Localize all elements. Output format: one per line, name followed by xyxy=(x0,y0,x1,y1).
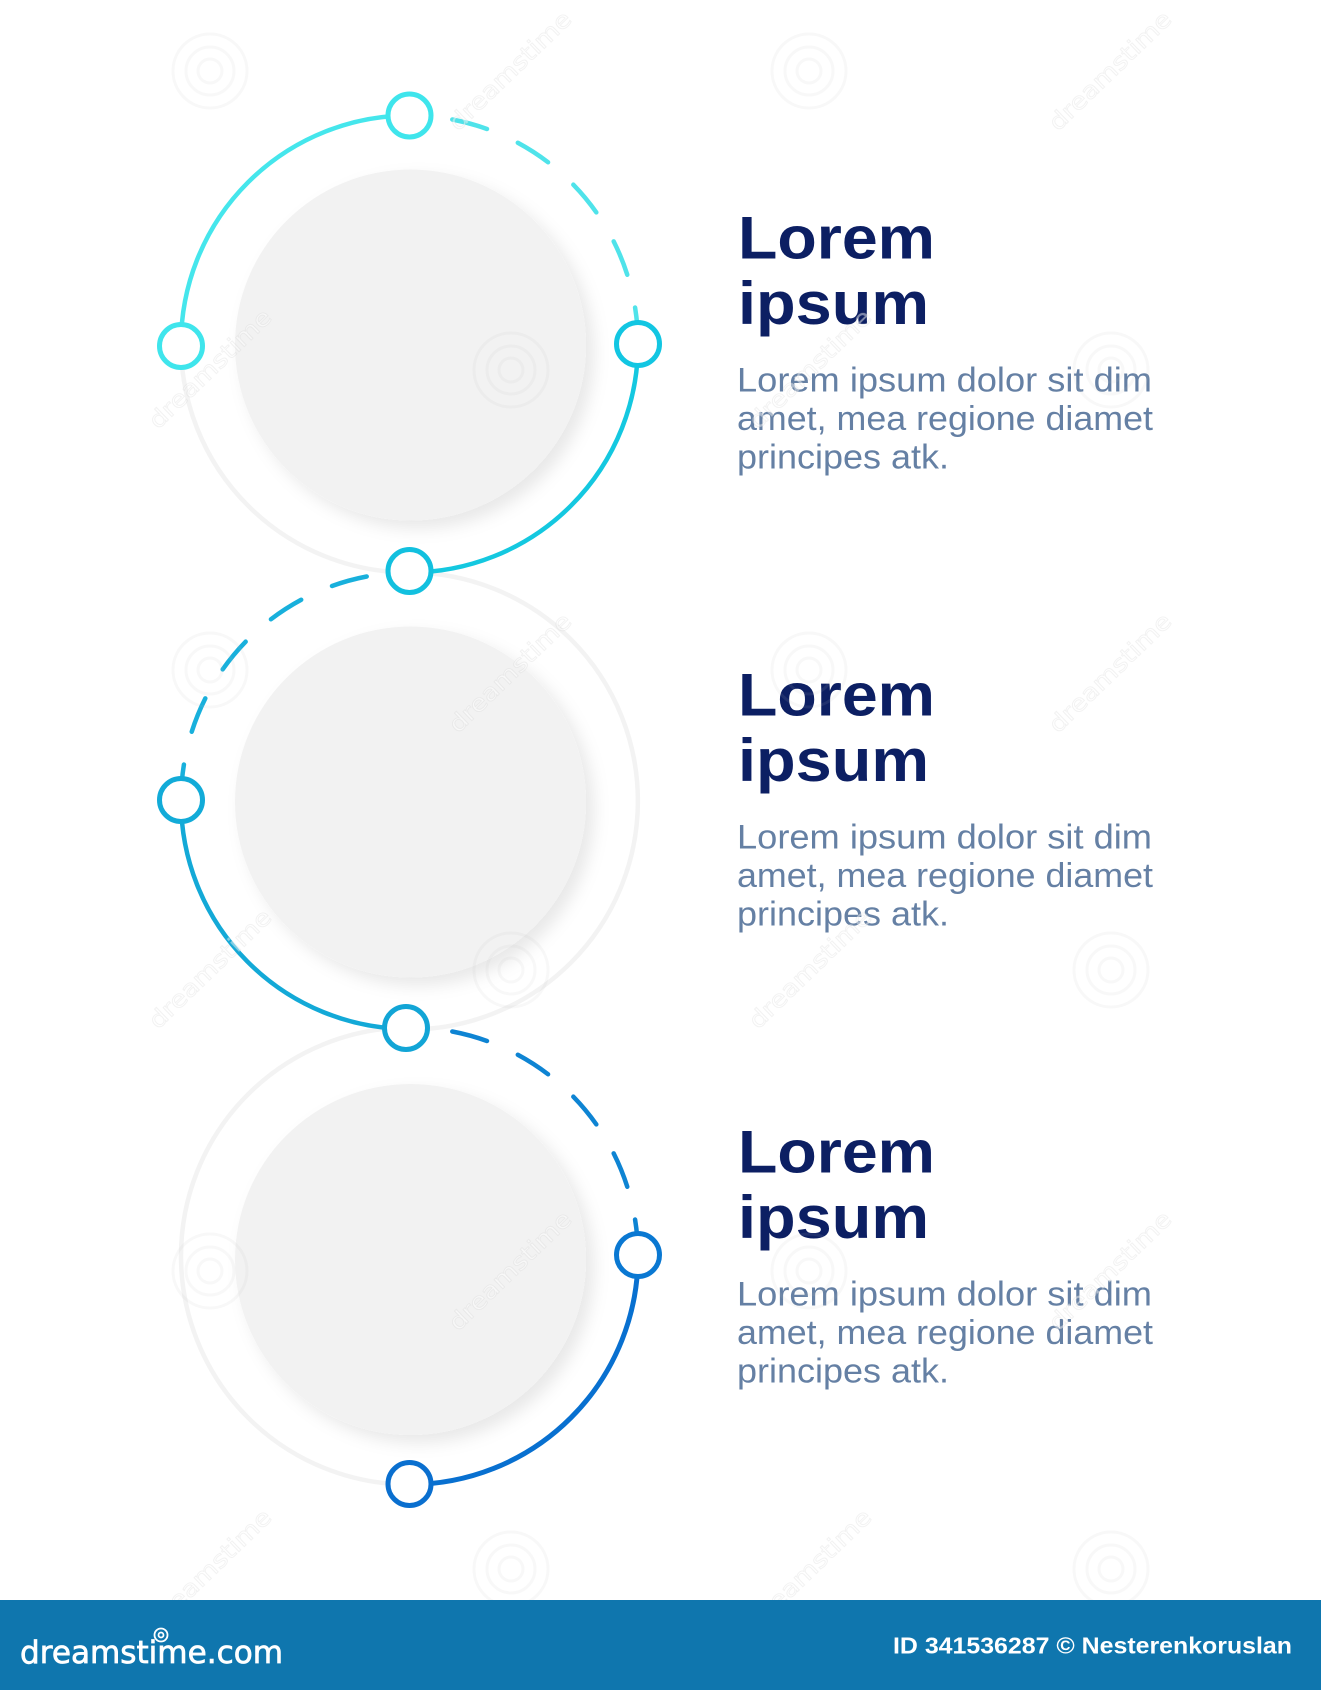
watermark text: dreamstime xyxy=(1044,6,1177,136)
watermark text: dreamstime xyxy=(444,1206,577,1336)
watermark text: dreamstime xyxy=(1044,1206,1177,1336)
description 3: Lorem ipsum dolor sit dim xyxy=(737,1276,1152,1314)
heading 2: Lorem xyxy=(738,662,935,728)
dashed arc 3 xyxy=(452,1032,638,1256)
watermark text: dreamstime xyxy=(1044,608,1177,738)
heading 1: ipsum xyxy=(738,270,929,337)
node bottom 3 xyxy=(388,1462,431,1506)
heading 2 xyxy=(738,662,935,794)
node left 1 xyxy=(160,324,202,368)
description 3: principes atk. xyxy=(737,1352,949,1390)
heading 3: ipsum xyxy=(738,1184,929,1251)
dashed arc 2 xyxy=(181,576,367,801)
description 1 xyxy=(737,362,1154,476)
heading 3 xyxy=(738,1118,935,1251)
node right 3 xyxy=(616,1234,660,1276)
circle panel 3 xyxy=(235,1084,586,1435)
disc 3 xyxy=(235,1084,586,1435)
node bottom 1 xyxy=(388,550,431,592)
watermark text: dreamstime xyxy=(144,1504,277,1634)
heading 2: ipsum xyxy=(738,727,929,794)
watermark text: dreamstime xyxy=(144,304,277,434)
faint rings xyxy=(181,344,638,1484)
watermark text xyxy=(144,6,1177,1634)
footer credit: ID 341536287 © Nesterenkoruslan xyxy=(893,1632,1292,1658)
description 2 xyxy=(737,818,1154,934)
node left 2 xyxy=(160,778,202,822)
disc 2 xyxy=(235,626,586,978)
solid arc lower right 3 xyxy=(410,1256,638,1484)
circle panel 2 xyxy=(235,626,586,978)
watermark text: dreamstime xyxy=(744,904,877,1034)
heading 1: Lorem xyxy=(738,204,935,272)
solid arc lower right xyxy=(410,344,638,572)
watermark spirals xyxy=(173,34,1148,1606)
icon: logo spiral xyxy=(154,1628,168,1642)
watermark text: dreamstime xyxy=(444,6,577,136)
node right 1 xyxy=(616,322,660,366)
node top 1 xyxy=(388,94,431,137)
description 2: principes atk. xyxy=(737,896,949,934)
description 1: amet, mea regione diamet xyxy=(737,400,1154,438)
timeline step 1 xyxy=(181,116,638,572)
watermark text: dreamstime xyxy=(744,1504,877,1634)
node bottom 2 xyxy=(384,1006,428,1050)
description 3 xyxy=(737,1276,1154,1390)
watermark text: dreamstime xyxy=(744,304,877,434)
dashed arc 1 xyxy=(452,120,638,344)
solid arc upper left xyxy=(181,116,410,344)
disc 1 xyxy=(235,170,586,520)
description 1: principes atk. xyxy=(737,438,949,476)
text block 2 xyxy=(737,662,1154,934)
description 3: amet, mea regione diamet xyxy=(737,1314,1154,1352)
circle panel 1 xyxy=(235,170,586,520)
text block 3 xyxy=(737,1118,1154,1390)
footer logo: dreamstime.com xyxy=(20,1635,283,1671)
timeline step 2 xyxy=(181,576,406,1029)
nodes xyxy=(160,94,660,1506)
timeline step 3 xyxy=(410,1032,638,1484)
text block 1 xyxy=(737,204,1154,476)
description 2: amet, mea regione diamet xyxy=(737,857,1154,895)
description 1: Lorem ipsum dolor sit dim xyxy=(737,362,1152,400)
footer bar xyxy=(0,1600,1321,1690)
heading 3: Lorem xyxy=(738,1118,935,1186)
heading 1 xyxy=(738,204,935,337)
watermark text: dreamstime xyxy=(444,608,577,738)
description 2: Lorem ipsum dolor sit dim xyxy=(737,818,1152,856)
solid arc lower left xyxy=(181,801,406,1029)
watermark text: dreamstime xyxy=(144,904,277,1034)
